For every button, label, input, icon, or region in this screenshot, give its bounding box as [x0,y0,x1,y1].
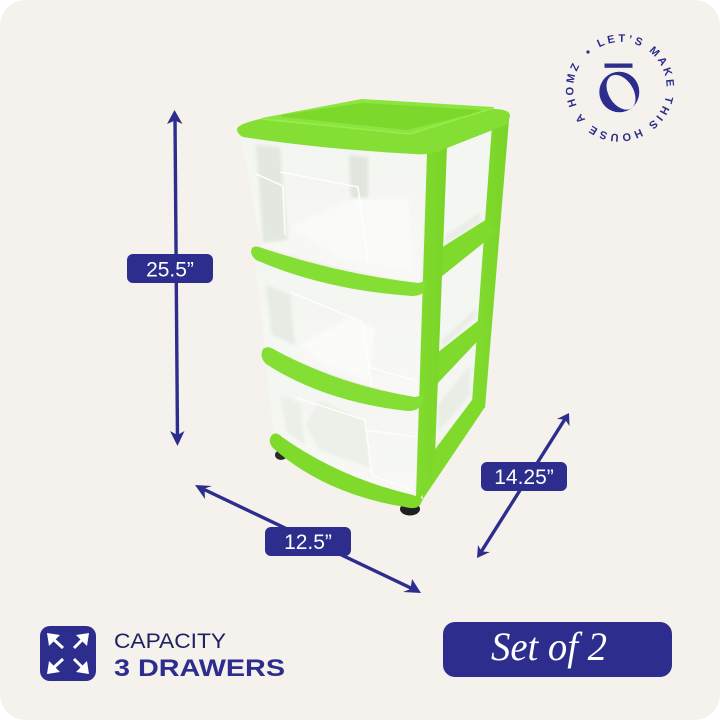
slogan dot [586,50,590,54]
drawer handle 2 [262,347,424,411]
capacity text: CAPACITY [114,630,226,653]
top frame [237,109,510,154]
side panels [433,126,494,444]
side rails [420,219,497,499]
lid [262,100,493,134]
drawer 3 clear body [265,358,418,497]
depth label [481,462,567,491]
height arrow [167,110,184,446]
capacity text [114,630,285,682]
height label: 25.5” [146,258,194,282]
drawer 1 clear body [240,135,428,283]
set of 2 button [443,622,672,677]
width arrow [195,485,421,593]
capacity icon [40,626,96,681]
expand arrows [47,633,89,674]
width label [265,527,351,556]
logo ring opening [601,70,641,115]
depth label: 14.25” [494,466,554,489]
width label: 12.5” [284,531,332,554]
side panel shading [438,212,480,432]
circular slogan: LET’S MAKE THIS HOUSE A HOMZ [566,34,674,142]
drawer 2 details [266,285,417,387]
drawer handle 1 [251,246,427,296]
back post [472,120,509,408]
height label [127,254,213,283]
logo ring [599,72,639,112]
set of 2 button: Set of 2 [491,624,607,669]
brand logo badge [566,34,674,142]
logo bar [604,64,632,68]
drawer 2 clear body [254,258,422,398]
drawer 1 details [256,145,414,270]
drawer 3 details [280,395,416,491]
front post [416,147,447,499]
capacity value: 3 DRAWERS [114,655,285,682]
product photo: three drawer cart [237,100,510,516]
drawer handle 3 [270,433,423,508]
depth arrow [477,413,570,558]
wheels [275,450,420,516]
